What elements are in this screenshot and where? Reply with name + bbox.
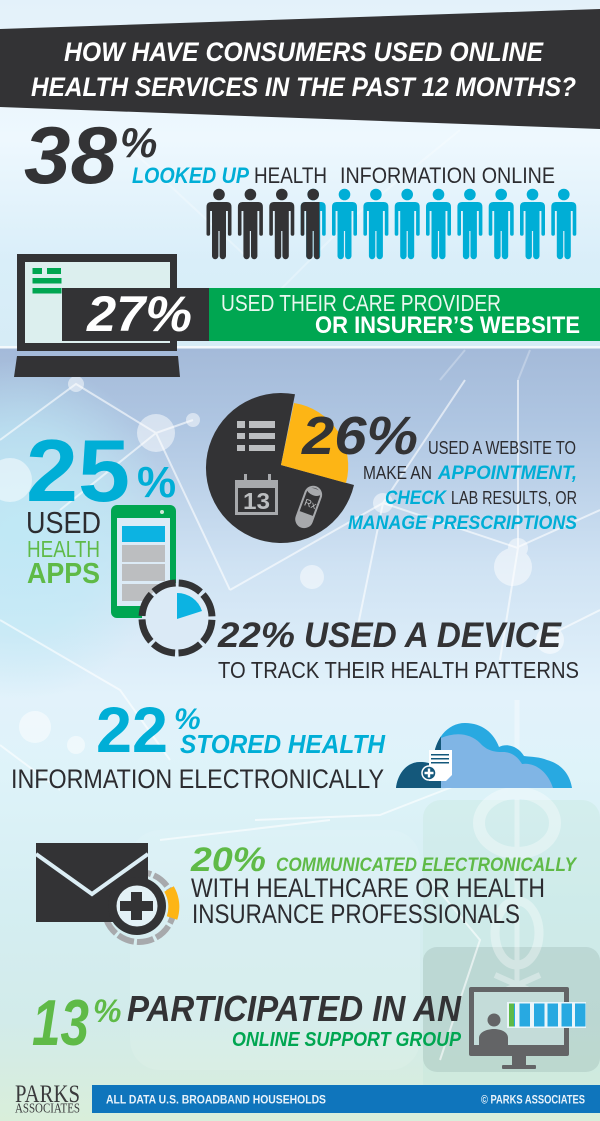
footer bar (92, 1085, 600, 1113)
stat: 13% online support group: % (93, 993, 121, 1029)
title banner (0, 9, 600, 129)
footer bar: ALL DATA U.S. BROADBAND HOUSEHOLDS (106, 1092, 326, 1106)
stat: 25% used health apps: % (137, 458, 176, 507)
pie chart with health icons (206, 393, 354, 543)
stat: 25% used health apps: 25 (26, 421, 130, 520)
icon: calendar: 13 (243, 488, 270, 514)
stat: 13% online support group: ONLINE SUPPORT GROUP (232, 1029, 462, 1051)
stat band: 27% care provider or insurer website: USED THEIR CARE PROVIDER (221, 290, 501, 316)
stat: 13% online support group: 13 (32, 986, 89, 1059)
stat: 20% communicated electronically: WITH HEALTHCARE OR HEALTH (191, 873, 545, 903)
stat: 20% communicated electronically: INSURANCE PROFESSIONALS (192, 899, 520, 929)
icon: tracking dial (142, 583, 212, 653)
title text: HOW HAVE CONSUMERS USED ONLINE (64, 37, 544, 67)
stat: 26% used a website: CHECK (385, 488, 447, 509)
icon: envelope with plus badge (36, 843, 174, 942)
stat: 26% used a website: MANAGE PRESCRIPTIONS (348, 513, 577, 534)
stat: 25% used health apps: APPS (27, 558, 100, 590)
stat band: 27% care provider or insurer website: OR INSURER’S WEBSITE (315, 312, 580, 339)
stat: 13% online support group: PARTICIPATED IN AN (127, 988, 462, 1029)
progress bars (507, 1002, 586, 1028)
logo: Parks Associates (15, 1081, 80, 1116)
stat: 20% communicated electronically: COMMUNICATED ELECTRONICALLY (276, 855, 578, 876)
stat: 22% stored health information: 22 (96, 694, 168, 766)
icon: row of twelve people (206, 189, 576, 259)
stat: 38% looked up health information online: % (120, 119, 157, 166)
stat band: 27% care provider or insurer website: 27% (86, 286, 192, 342)
stat: 22% stored health information: INFORMATION ELECTRONICALLY (11, 764, 384, 794)
stat: 25% used health apps (26, 421, 176, 590)
stat: 38% looked up health information online (24, 111, 555, 201)
icon: list (237, 421, 275, 451)
icon: prescription bottle: Rx (302, 498, 318, 512)
icon: smartphone (111, 505, 176, 618)
stat: 22% used a device: 22% (217, 616, 295, 655)
icon: monitor with person (469, 987, 586, 1069)
stat: 22% used a device: USED A DEVICE (304, 616, 563, 655)
icon: laptop (14, 254, 180, 377)
stat: 38% looked up health information online: INFORMATION ONLINE (340, 163, 555, 188)
stat band: 27% care provider or insurer website (62, 286, 600, 342)
title text (31, 37, 576, 102)
stat: 22% used a device (217, 616, 579, 683)
stat: 26% used a website: MAKE AN (363, 463, 432, 483)
stat: 25% used health apps: HEALTH (27, 536, 100, 562)
icon: prescription bottle (294, 484, 323, 529)
stat: 26% used a website: 26% (301, 406, 418, 466)
logo: Parks Associates: PARKS (15, 1081, 80, 1108)
stat: 26% used a website: APPOINTMENT, (437, 463, 577, 484)
stat: 38% looked up health information online: 38 (24, 111, 117, 201)
icon: calendar (235, 474, 278, 515)
stat: 25% used health apps: USED (26, 505, 101, 540)
stat: 20% communicated electronically (190, 841, 578, 929)
stat: 22% stored health information: STORED HEALTH (180, 729, 386, 759)
logo: Parks Associates: ASSOCIATES (15, 1102, 80, 1116)
stat: 22% stored health information (11, 694, 386, 794)
icon: cloud with document (396, 723, 572, 788)
stat: 22% stored health information: % (174, 703, 201, 736)
stat: 13% online support group (32, 986, 462, 1059)
stat: 20% communicated electronically: 20% (190, 841, 266, 879)
stat: 38% looked up health information online: LOOKED UP (132, 163, 249, 188)
stat: 38% looked up health information online: HEALTH (254, 163, 327, 188)
stat: 26% used a website (301, 406, 577, 534)
